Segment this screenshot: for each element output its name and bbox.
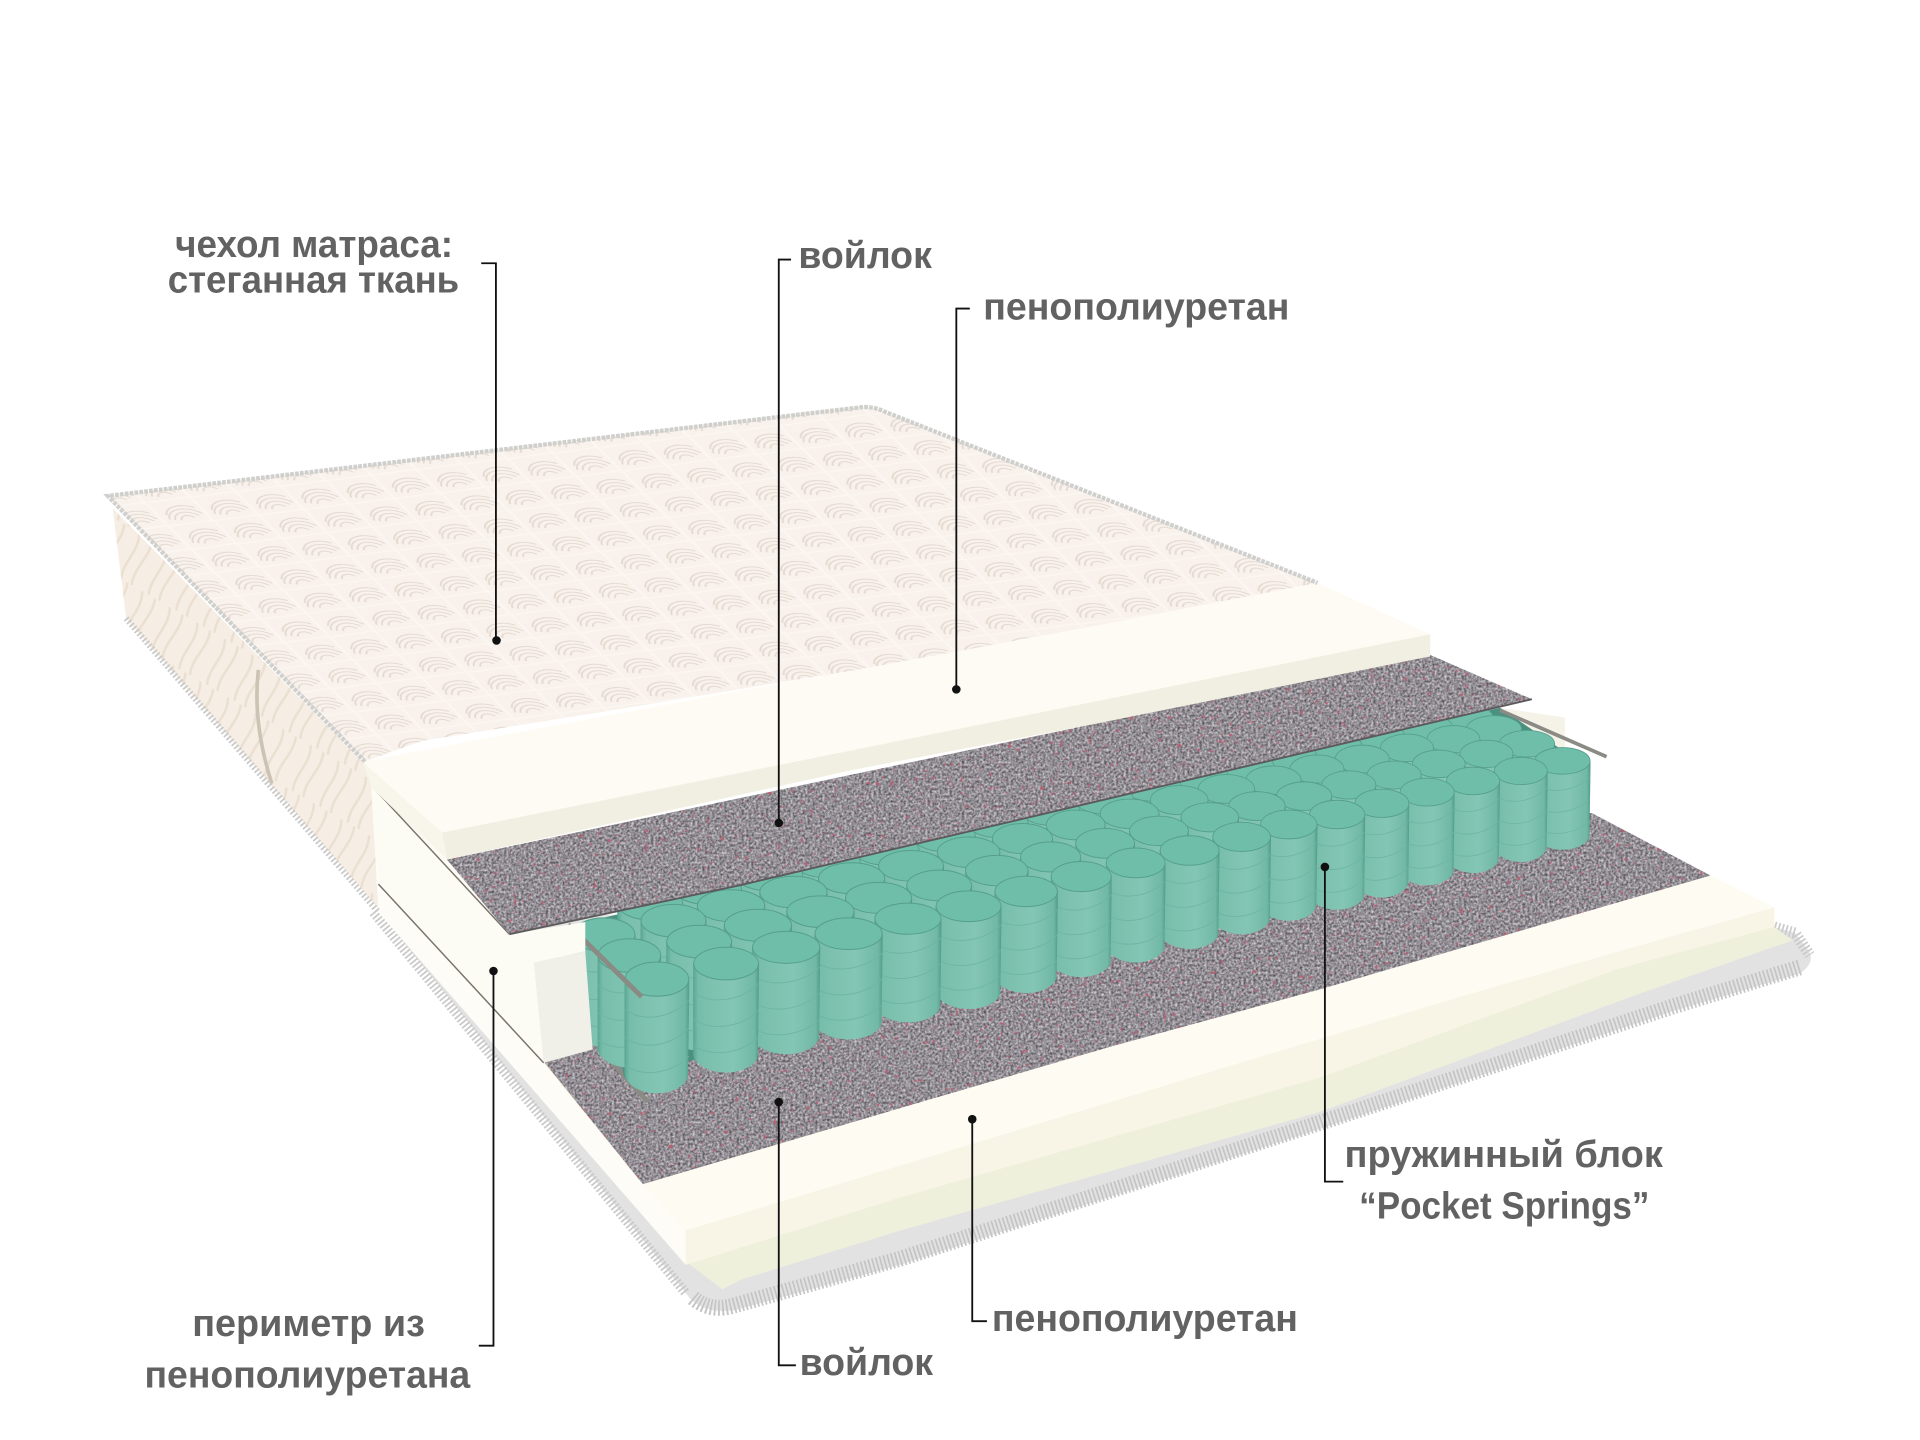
label: pocket springs: пружинный блок	[1344, 1134, 1663, 1176]
label: perimeter: пенополиуретана	[144, 1354, 471, 1396]
layer: side fabric	[113, 508, 378, 912]
spring row: front	[624, 748, 1591, 1093]
spring row: back	[572, 716, 1522, 1047]
leader: lower foam	[968, 1115, 987, 1321]
leader: cover	[481, 263, 501, 645]
leader: pocket springs	[1321, 863, 1343, 1182]
label: pocket springs	[1344, 1134, 1663, 1227]
label: pocket springs: “Pocket Springs”	[1359, 1185, 1649, 1227]
rod: upper perimeter rods	[568, 710, 1607, 997]
layer: bottom cover rim	[373, 912, 1811, 1311]
label: perimeter: периметр из	[192, 1303, 425, 1345]
label: cover: чехол матраса:	[175, 224, 453, 266]
label: perimeter	[144, 1303, 471, 1396]
leader: upper felt	[774, 260, 791, 827]
layer: quilted cover	[108, 406, 1318, 762]
leader: upper foam	[952, 309, 970, 694]
layer: upper foam	[362, 583, 1430, 860]
layer: rear perimeter foam	[1500, 708, 1565, 765]
leader: lower felt	[774, 1098, 796, 1365]
leader: perimeter	[479, 967, 498, 1346]
chart: pocket springs block	[572, 705, 1591, 1093]
spring row: rear	[617, 705, 1494, 1013]
label: cover	[168, 224, 459, 302]
layer: lower foam	[378, 876, 1774, 1265]
layer: side perimeter foam	[367, 781, 593, 1063]
rod: lower perimeter rod	[595, 1043, 648, 1102]
layer: upper felt	[447, 654, 1532, 934]
layer: bottom ivory sheet	[404, 912, 1793, 1289]
label: upper felt: войлок	[798, 235, 932, 277]
label: lower felt: войлок	[800, 1342, 933, 1384]
backing between springs	[585, 708, 1580, 1078]
illustration: mattress cross-section	[108, 406, 1811, 1311]
label: upper foam: пенополиуретан	[983, 287, 1289, 329]
label: lower foam: пенополиуретан	[992, 1298, 1298, 1340]
spring row: middle	[598, 730, 1555, 1068]
label: cover: стеганная ткань	[168, 260, 459, 302]
layer: lower felt	[545, 813, 1711, 1184]
